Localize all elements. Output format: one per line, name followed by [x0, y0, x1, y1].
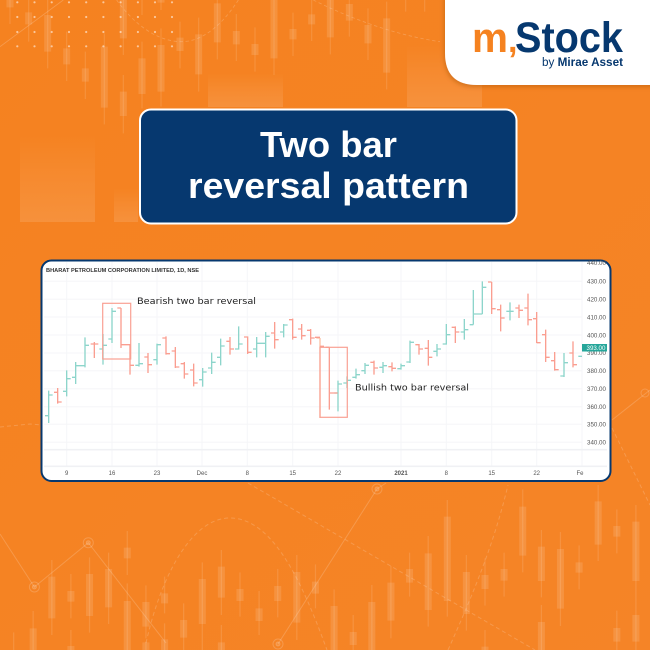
price axis labels: 370.00	[587, 386, 606, 393]
date axis labels: 2021	[394, 471, 408, 477]
background pattern: top trend lines	[0, 0, 440, 47]
date axis labels: 15	[289, 471, 297, 477]
price axis labels	[587, 260, 606, 446]
background pattern: top candlesticks	[10, 0, 425, 133]
annotation: bullish: Bullish two bar reversal	[355, 383, 469, 394]
title banner	[140, 110, 516, 224]
logo background	[445, 0, 650, 85]
date axis labels: 8	[246, 471, 250, 477]
title text: reversal pattern	[188, 165, 469, 206]
logo panel: Stock	[515, 14, 623, 62]
bearish reversal highlight box	[103, 303, 131, 359]
date axis labels	[65, 471, 584, 477]
chart title: BHARAT PETROLEUM CORPORATION LIMITED, 1D, NSE	[46, 268, 199, 274]
date axis labels: Dec	[197, 471, 207, 477]
price axis labels: 440.00	[587, 260, 606, 267]
date axis labels: 22	[533, 471, 541, 477]
price axis labels: 390.00	[587, 350, 606, 357]
price axis labels: 350.00	[587, 422, 606, 428]
price axis labels: 380.00	[587, 368, 606, 375]
logo wordmark m,Stock: m	[472, 14, 508, 61]
date axis labels: 23	[154, 471, 161, 477]
logo panel: ,	[508, 22, 517, 60]
chart grid	[44, 262, 607, 466]
bullish reversal highlight box	[320, 347, 347, 417]
date axis labels: 16	[109, 471, 116, 477]
date axis labels: 9	[65, 471, 69, 477]
background pattern: top fading panels	[20, 45, 482, 222]
price axis labels: 340.00	[587, 440, 606, 446]
background pattern: bottom candlesticks	[14, 485, 636, 650]
background pattern: dot grid	[16, 1, 173, 47]
annotation: bearish: Bearish two bar reversal	[137, 296, 256, 307]
background pattern: bottom trend lines	[0, 389, 650, 650]
date axis labels: 22	[335, 471, 342, 477]
logo panel	[445, 0, 650, 85]
date axis labels: 15	[488, 471, 496, 477]
price axis labels: 360.00	[587, 404, 606, 411]
current price tag: 393.00	[586, 345, 606, 352]
bars: november to december	[45, 308, 320, 423]
date axis labels: Fe	[576, 471, 584, 477]
logo tagline: by Mirae Asset	[542, 57, 623, 69]
price axis labels: 430.00	[587, 278, 606, 286]
price axis labels: 400.00	[587, 332, 606, 339]
price axis labels: 420.00	[587, 296, 606, 304]
date axis labels: 8	[445, 471, 449, 477]
bars: december to february	[315, 281, 582, 411]
title text: Two bar	[260, 124, 397, 165]
price axis labels: 410.00	[587, 314, 606, 321]
current price tag	[582, 344, 607, 352]
chart card	[42, 260, 610, 481]
panel: price chart	[42, 260, 610, 481]
